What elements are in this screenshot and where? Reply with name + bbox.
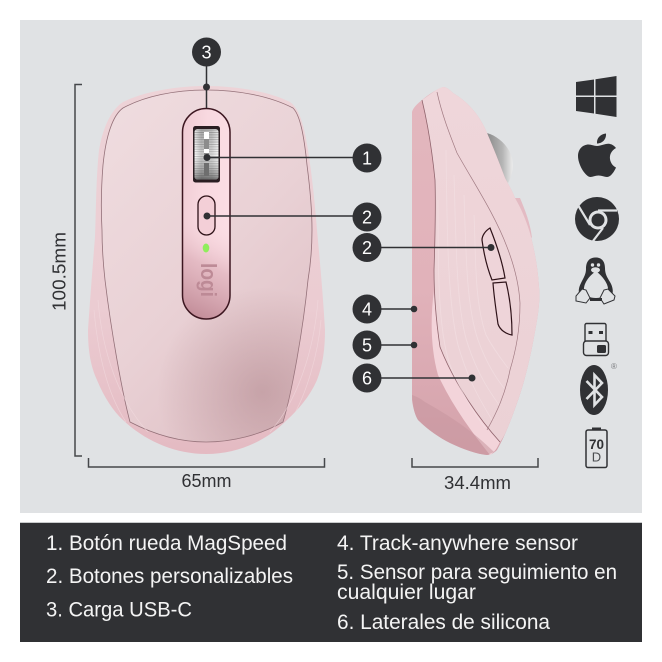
side body outline <box>412 87 539 455</box>
lower side ridges <box>94 300 321 432</box>
dimension: width 65mm: 65mm <box>182 471 232 491</box>
callout 2: side button <box>352 233 494 262</box>
icon: Linux Tux <box>576 257 615 304</box>
dimension: depth 34.4mm: 34.4mm <box>444 473 511 493</box>
feature list: right column: cualquier lugar <box>337 581 476 604</box>
side button front <box>482 228 505 280</box>
callout 5: tracking sensor: 5 <box>362 336 372 356</box>
side scroll wheel <box>487 133 513 183</box>
side button back <box>493 282 512 335</box>
scroll wheel <box>193 126 220 182</box>
callout 3: USB-C charging: 3 <box>201 42 212 62</box>
feature list: right column: 4. Track-anywhere sensor <box>337 532 578 555</box>
callout 1: MagSpeed wheel: 1 <box>362 148 372 168</box>
side base shading <box>412 395 494 455</box>
icon: Windows <box>576 76 616 117</box>
icon: Bluetooth: ® <box>611 362 617 371</box>
panel: feature list background <box>20 522 642 642</box>
feature list: right column: 6. Laterales de silicona <box>337 611 550 634</box>
side edge lines <box>422 92 520 442</box>
status LED <box>203 244 209 252</box>
icon: battery 70 D <box>586 428 607 468</box>
center control strip <box>182 108 230 319</box>
mode shift button <box>198 196 215 235</box>
callout 2: side button: 2 <box>362 238 372 258</box>
icon: battery 70 D: D <box>592 450 601 464</box>
dimension: height 100.5mm: 100.5mm <box>50 232 70 311</box>
strip lower shading <box>182 108 230 319</box>
icon: Bluetooth <box>580 362 617 415</box>
callout 3: USB-C charging <box>192 38 221 108</box>
feature list: right column: 5. Sensor para seguimiento en <box>337 561 617 584</box>
mouse side view <box>412 87 539 455</box>
side ridges <box>438 150 508 428</box>
feature list: left column: 1. Botón rueda MagSpeed <box>46 532 287 555</box>
callout 1: MagSpeed wheel <box>204 144 382 172</box>
panel: product diagram background <box>20 20 642 513</box>
feature list: left column <box>46 532 293 622</box>
callout 6: silicone sides <box>352 364 476 392</box>
strip outline <box>182 108 230 319</box>
feature list: right column <box>337 532 617 634</box>
callout 6: silicone sides: 6 <box>362 368 372 388</box>
dimension: height 100.5mm <box>50 84 82 456</box>
feature list: left column: 3. Carga USB-C <box>46 598 192 622</box>
icon: Apple <box>578 134 616 177</box>
callout 5: tracking sensor <box>352 330 417 360</box>
side top surface <box>422 87 539 442</box>
callout 2: top button: 2 <box>362 208 372 228</box>
mouse palm surface <box>101 90 312 442</box>
callout 2: top button <box>204 202 382 232</box>
palm shading <box>180 310 302 442</box>
mouse top view <box>88 86 325 454</box>
feature list: left column: 2. Botones personalizables <box>46 565 293 588</box>
callout 4: track-anywhere sensor: 4 <box>362 300 372 320</box>
logi wordmark: logi <box>196 263 221 297</box>
icon: Chrome <box>575 197 619 241</box>
callout 4: track-anywhere sensor <box>352 294 417 324</box>
icon: USB receiver <box>584 324 608 356</box>
dimension: depth 34.4mm <box>412 458 538 493</box>
mouse body outline <box>88 86 325 454</box>
dimension: width 65mm <box>88 458 324 491</box>
side top button nub <box>515 198 532 238</box>
side highlight strip <box>432 290 500 455</box>
icon: battery 70 D: 70 <box>589 437 604 452</box>
